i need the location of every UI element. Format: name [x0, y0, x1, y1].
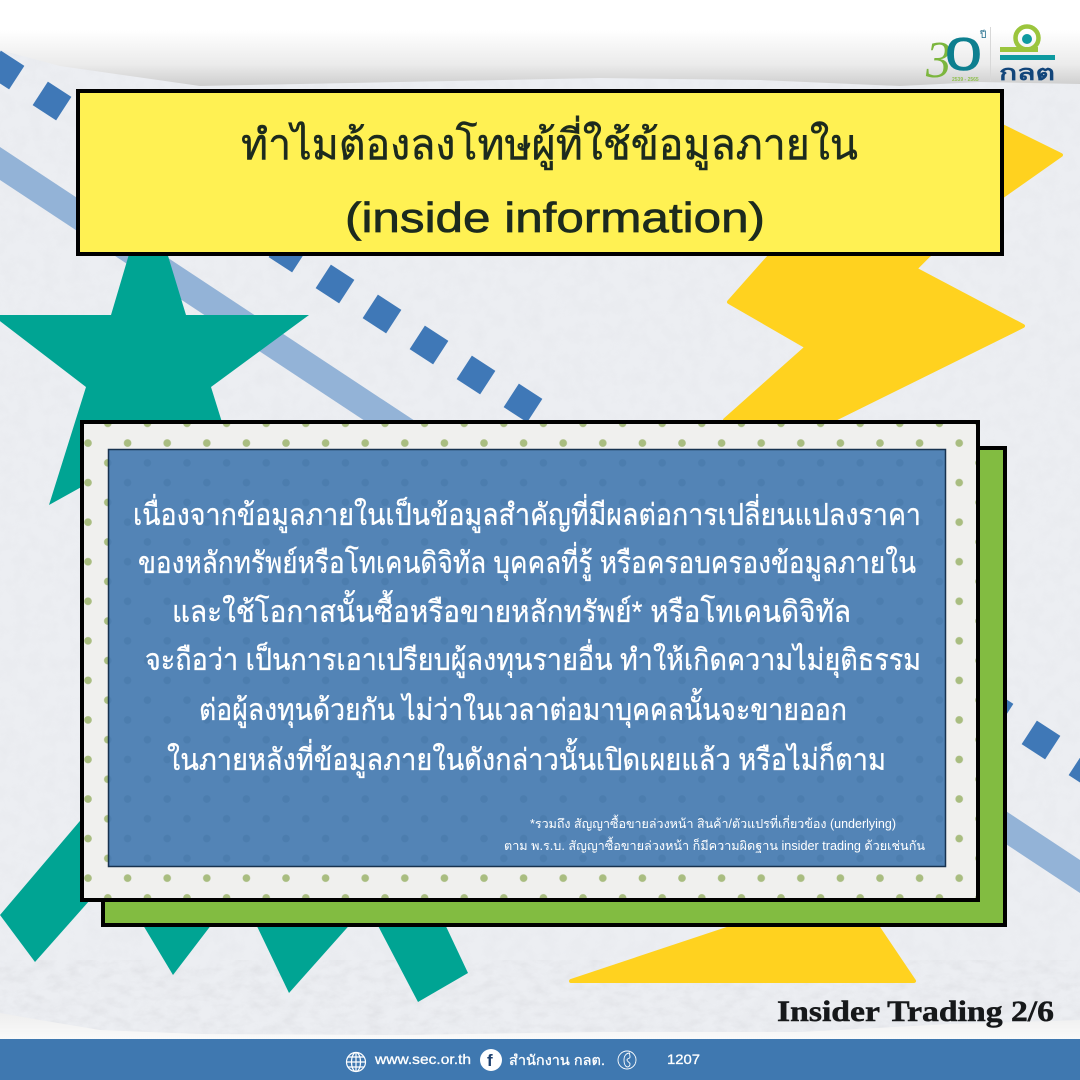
- icon: globe: [346, 1052, 366, 1072]
- logo: 30th anniversary: ปี: [979, 26, 986, 41]
- body text: และใช้โอกาสนั้นซื้อหรือขายหลักทรัพย์* หรือโทเคนดิจิทัล: [172, 590, 851, 629]
- yellow lightning bolt top: [725, 120, 1061, 420]
- logo: 30th anniversary: 2539 - 2565: [952, 77, 979, 83]
- dotted frame panel: [82, 422, 978, 900]
- teal star: [0, 190, 309, 505]
- icon: facebook: f: [487, 1051, 493, 1070]
- icon: facebook: [480, 1049, 502, 1071]
- body text: ในภายหลังที่ข้อมูลภายในดังกล่าวนั้นเปิดเผยแล้ว หรือไม่ก็ตาม: [167, 738, 886, 778]
- website text: www.sec.or.th: [374, 1051, 471, 1067]
- body text: เนื่องจากข้อมูลภายในเป็นข้อมูลสำคัญที่มีผลต่อการเปลี่ยนแปลงราคา: [133, 494, 921, 533]
- title line 2: (inside information): [345, 194, 765, 241]
- green backing panel: [103, 448, 1005, 925]
- footnote: ตาม พ.ร.บ. สัญญาซื้อขายล่วงหน้า ก็มีความผิดฐาน insider trading ด้วยเช่นกัน: [504, 836, 925, 853]
- logo: SEC Thailand: [990, 26, 1055, 85]
- dashed blue diagonal squares: [0, 51, 1080, 790]
- footnote: *รวมถึง สัญญาซื้อขายล่วงหน้า สินค้า/ตัวแปรที่เกี่ยวข้อง (underlying): [530, 814, 896, 831]
- icon: phone: [618, 1051, 636, 1069]
- body text: [133, 494, 921, 778]
- logo: 30th anniversary: 3: [925, 32, 951, 89]
- logo: SEC Thailand: กลต: [999, 62, 1055, 85]
- torn paper bottom edge: [0, 1013, 1080, 1040]
- teal zigzag ribbon: [0, 815, 468, 1002]
- series label: Insider Trading 2/6: [777, 995, 1054, 1028]
- title line 1: ทำไมต้องลงโทษผู้ที่ใช้ข้อมูลภายใน: [241, 116, 858, 170]
- blue content panel: [108, 450, 946, 866]
- footer bar: [0, 1039, 1080, 1080]
- body text: ต่อผู้ลงทุนด้วยกัน ไม่ว่าในเวลาต่อมาบุคคลนั้นจะขายออก: [199, 688, 847, 729]
- logo: 30th anniversary: 0: [945, 28, 982, 80]
- title panel: [78, 91, 1002, 254]
- hotline number: 1207: [667, 1051, 700, 1067]
- logo: 30th anniversary: [925, 26, 986, 89]
- facebook page text: สำนักงาน กลต.: [509, 1052, 605, 1068]
- torn paper top: [0, 0, 1080, 86]
- body text: ของหลักทรัพย์หรือโทเคนดิจิทัล บุคคลที่รู้ หรือครอบครองข้อมูลภายใน: [138, 542, 916, 582]
- footnote: [504, 814, 925, 853]
- light blue diagonal band: [0, 147, 1080, 893]
- yellow lightning bolt bottom: [571, 920, 914, 981]
- body text: จะถือว่า เป็นการเอาเปรียบผู้ลงทุนรายอื่น ทำให้เกิดความไม่ยุติธรรม: [145, 639, 921, 679]
